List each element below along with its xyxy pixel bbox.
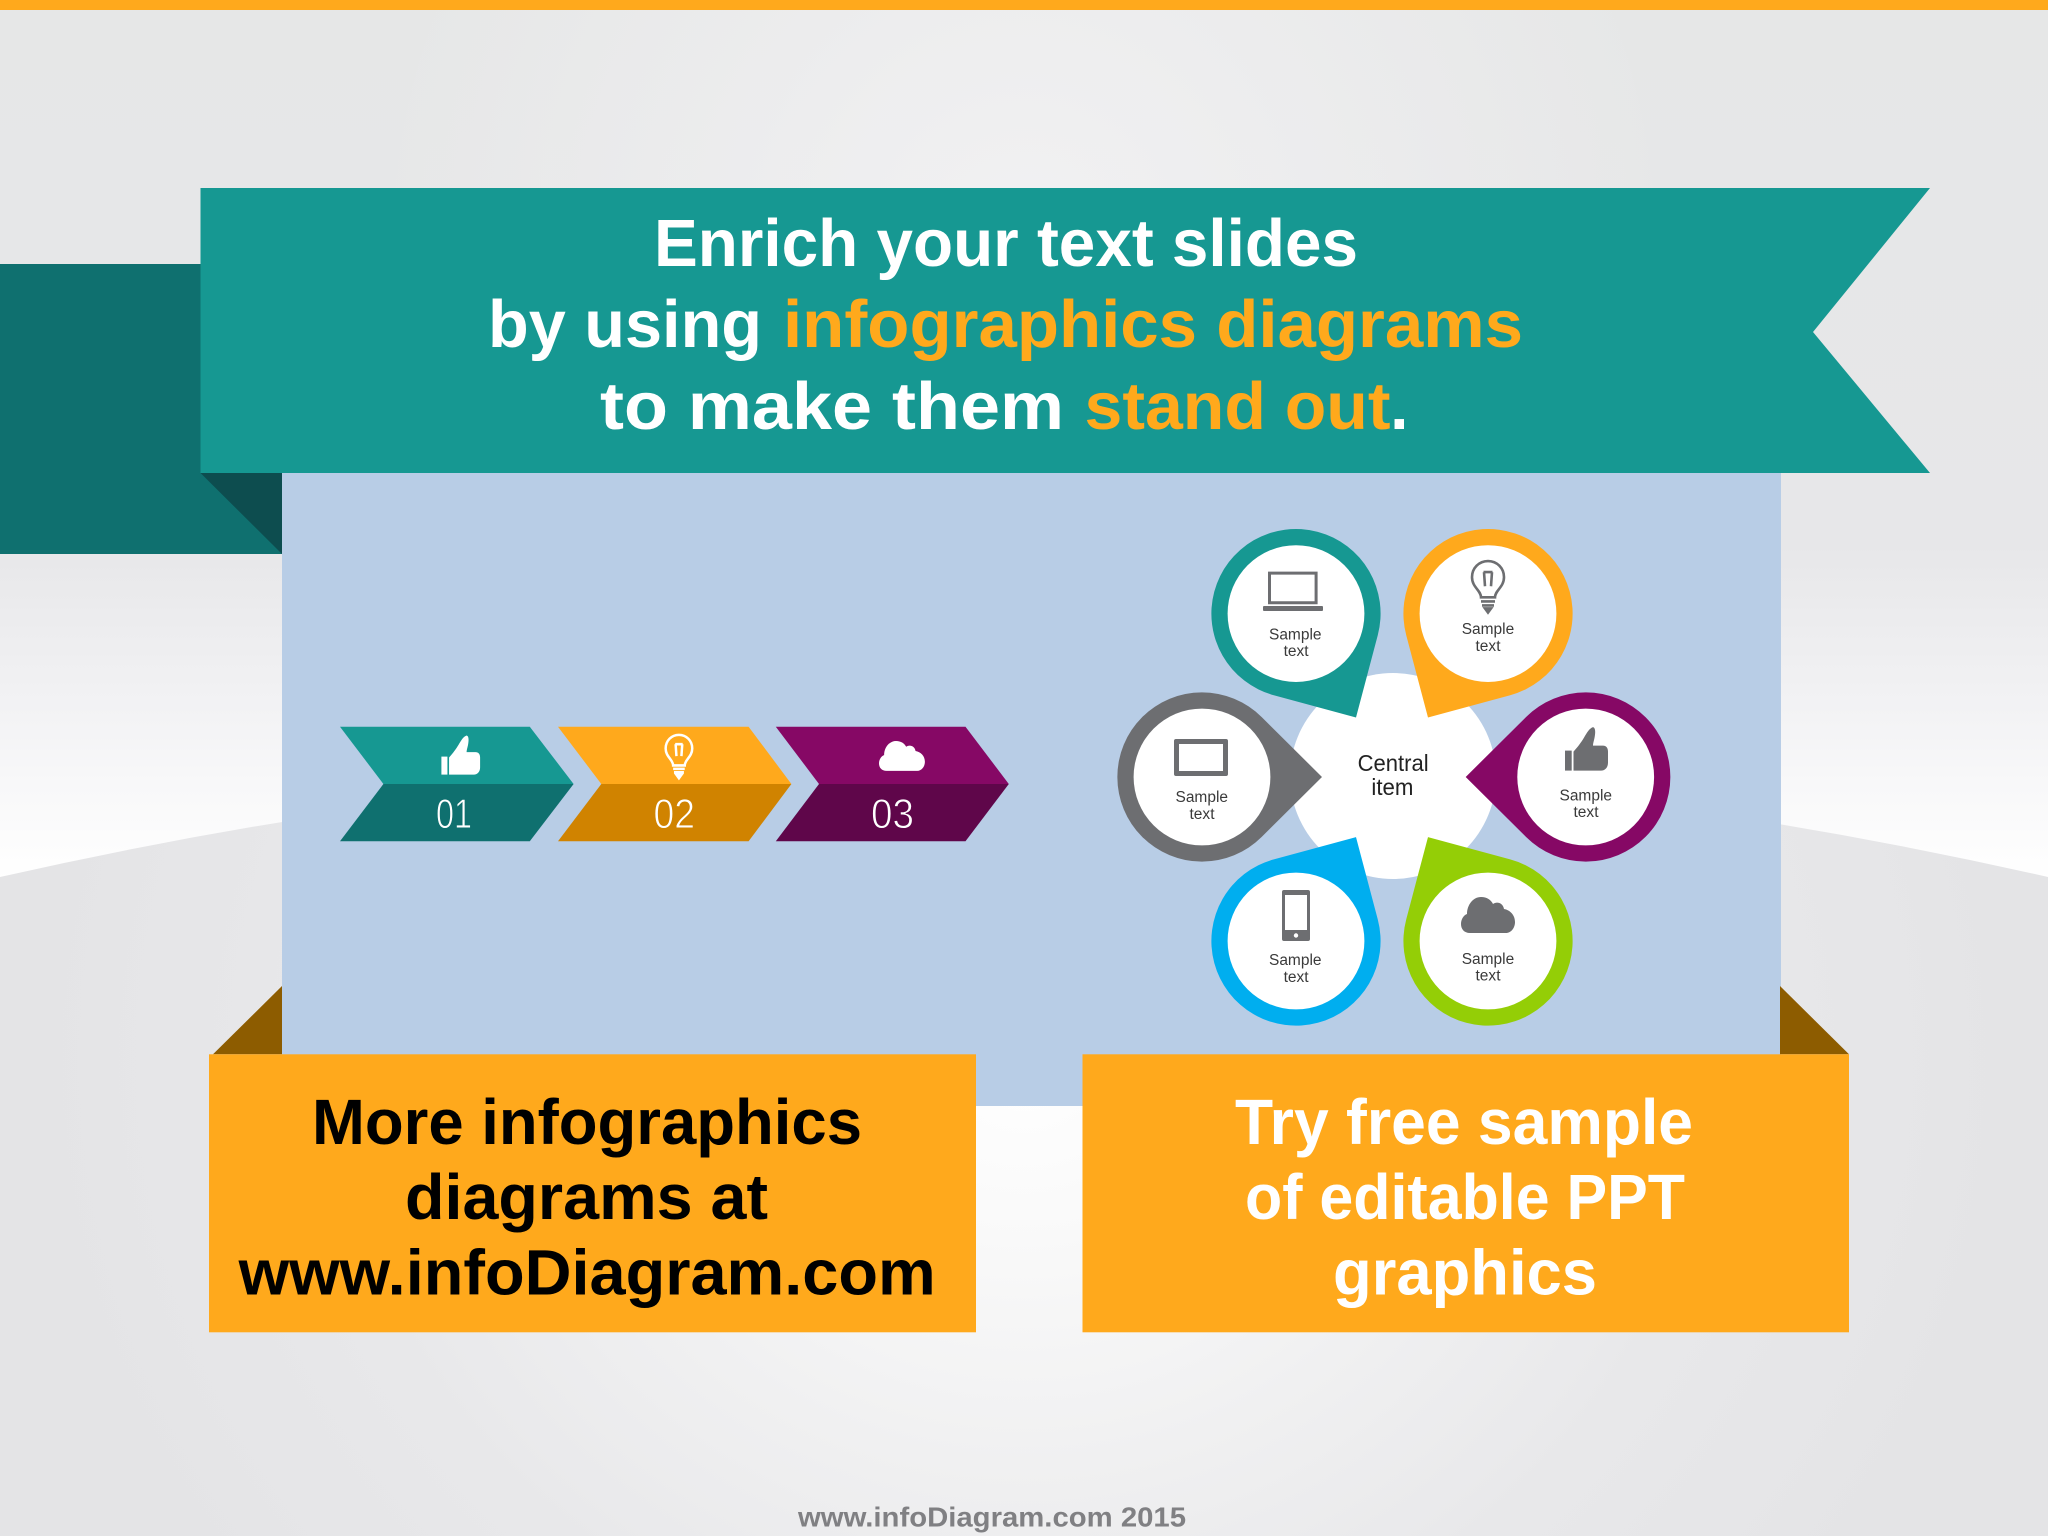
hub diagram	[1117, 498, 1670, 1057]
pin: blue phone	[1180, 795, 1429, 1057]
callout text: Try free sample	[1235, 1086, 1693, 1158]
callout: more infographics	[209, 986, 976, 1332]
label: Sample	[1176, 789, 1228, 806]
icon: cloud	[879, 741, 925, 771]
label: text	[1284, 969, 1309, 986]
icon: tablet	[1174, 739, 1228, 776]
label: Sample	[1560, 788, 1612, 805]
ribbon back fold	[0, 264, 282, 554]
panel: light blue slide preview	[282, 473, 1781, 1106]
label: Sample	[1462, 621, 1514, 638]
callout text: of editable PPT	[1245, 1161, 1685, 1233]
title line 3: stand out	[1084, 369, 1390, 444]
title line 2	[488, 287, 1523, 362]
callout text: diagrams at	[405, 1161, 768, 1233]
callout text: More infographics	[312, 1086, 862, 1158]
label: Sample	[1462, 951, 1514, 968]
callout text	[1235, 1086, 1693, 1308]
central item	[1290, 673, 1496, 879]
chevron 03	[776, 727, 1009, 841]
icon: light bulb	[666, 735, 692, 778]
callout text: graphics	[1333, 1236, 1597, 1308]
footer credit: www.infoDiagram.com 2015	[797, 1502, 1186, 1533]
callout text	[238, 1086, 936, 1308]
top accent bar	[0, 0, 2048, 10]
callout text: www.infoDiagram.com	[238, 1236, 936, 1308]
label: text	[1284, 643, 1309, 660]
label	[1176, 789, 1228, 823]
icon: smartphone	[1282, 890, 1310, 941]
label: text	[1574, 804, 1599, 821]
title line 3	[600, 369, 1409, 444]
callout: free sample	[1082, 986, 1849, 1332]
number 02: 02	[654, 790, 695, 837]
icon: thumbs up	[1565, 727, 1608, 771]
central item: Central	[1358, 750, 1429, 776]
pin: purple thumb	[1466, 692, 1670, 862]
title line 1: Enrich your text slides	[654, 206, 1358, 281]
title banner	[200, 188, 1930, 473]
pin: gray tablet	[1117, 692, 1322, 862]
label	[1462, 621, 1514, 655]
chevron 02	[558, 727, 791, 841]
icon: thumbs up	[441, 735, 480, 775]
chevron process	[340, 727, 1009, 841]
number 01: 01	[436, 790, 472, 837]
icon: laptop	[1263, 572, 1323, 611]
label: Sample	[1269, 626, 1322, 644]
title line 2: by using	[488, 287, 762, 362]
pin: orange bulb	[1355, 498, 1604, 760]
label	[1560, 788, 1612, 821]
title line 3: .	[1390, 369, 1409, 444]
label	[1269, 952, 1322, 986]
central item: item	[1371, 774, 1413, 800]
label: text	[1476, 638, 1501, 655]
label	[1462, 951, 1514, 985]
number 03: 03	[871, 790, 914, 837]
label: text	[1476, 968, 1501, 985]
label: text	[1190, 806, 1215, 823]
chevron 01	[340, 727, 574, 841]
icon: cloud	[1461, 897, 1515, 933]
pin: teal laptop	[1180, 498, 1429, 760]
title line 3: to make them	[600, 369, 1064, 444]
title line 2: infographics diagrams	[783, 287, 1523, 362]
icon: light bulb	[1472, 561, 1504, 613]
label: Sample	[1269, 952, 1322, 969]
label	[1269, 626, 1322, 660]
pin: green cloud	[1355, 795, 1604, 1057]
